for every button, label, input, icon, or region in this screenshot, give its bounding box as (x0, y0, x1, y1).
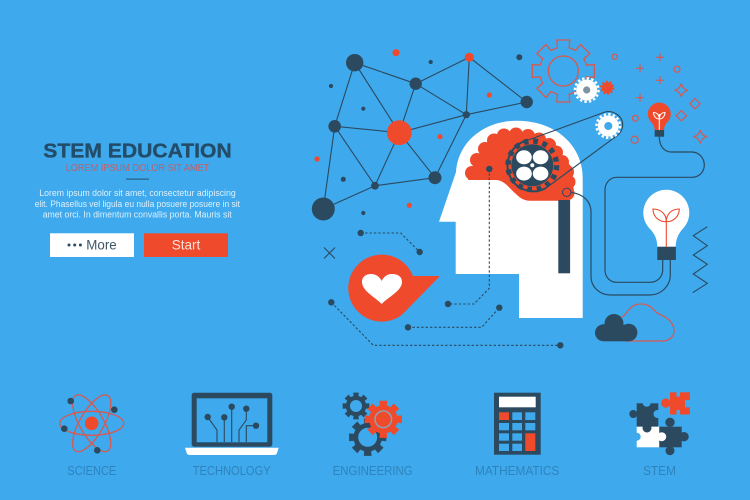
icon: puzzle pieces (629, 392, 690, 455)
panel: mathematics (475, 393, 559, 478)
icon: white gear top (575, 78, 598, 102)
dark brain stem bar (558, 200, 570, 273)
dotted connector lines (331, 169, 560, 345)
subtitle: LOREM IPSUM DOLOR SIT AMET (66, 163, 209, 174)
icon: laptop (185, 393, 279, 455)
decorative symbols (612, 53, 707, 143)
icon: cross (324, 248, 335, 258)
title: STEM EDUCATION (43, 140, 232, 162)
icon: gears (343, 393, 402, 456)
label: STEM (643, 464, 676, 478)
icon: atom (60, 390, 124, 457)
panel: technology (185, 393, 279, 478)
label: TECHNOLOGY (193, 464, 271, 478)
button: Start: Start (172, 236, 200, 252)
belt line (527, 112, 623, 188)
zigzag (693, 227, 707, 293)
wire: small bulb to big bulb (605, 137, 704, 282)
head silhouette (439, 121, 583, 318)
icon: brain gear (508, 140, 557, 191)
body text: amet orci. In dimentum convallis porta. Mauris sit (43, 209, 232, 219)
button: More (50, 233, 134, 257)
panel: engineering (333, 393, 413, 478)
icon: outline gear (532, 40, 594, 102)
icon: white gear on belt (596, 114, 620, 138)
icon: outline cloud (622, 304, 674, 341)
panel: stem (629, 392, 690, 478)
icon: dark cloud (595, 314, 637, 341)
icon: small red bulb (648, 103, 671, 137)
button: Start (144, 233, 228, 257)
connector dots (328, 166, 564, 348)
icon: calculator (494, 393, 541, 455)
body text: elit. Phasellus vel ligula eu nulla posuere posuere in sit (35, 199, 240, 209)
button: More: More (86, 236, 117, 252)
body text: Lorem ipsum dolor sit amet, consectetur adipiscing (39, 188, 236, 198)
label: ENGINEERING (333, 464, 413, 478)
network diagram (312, 49, 533, 220)
wire: brain to big bulb (571, 192, 670, 295)
icon: big bulb (643, 190, 689, 260)
brain wire terminal (562, 188, 571, 196)
brain (465, 128, 576, 201)
panel: science (60, 390, 124, 478)
label: SCIENCE (67, 464, 116, 478)
icon: heart speech bubble (348, 255, 440, 322)
label: MATHEMATICS (475, 464, 559, 478)
body text (35, 188, 240, 219)
panel: hero text (35, 140, 240, 257)
icon: red small gear (601, 82, 613, 94)
